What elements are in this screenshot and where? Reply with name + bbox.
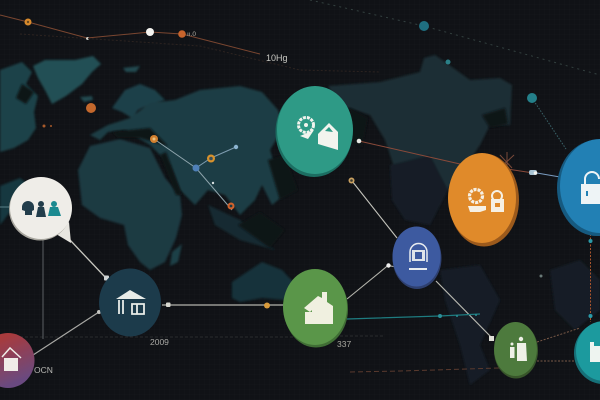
faint dotted line left: [20, 34, 380, 72]
teal line from green: [347, 314, 480, 319]
white to navy line: [70, 240, 106, 278]
icon: gear and envelope: [298, 118, 338, 150]
network on asia: [150, 135, 238, 210]
map: australia: [232, 262, 296, 302]
label 2009: 2009: [150, 337, 169, 347]
node: dark green people: [494, 322, 538, 378]
node: blue lock: [557, 139, 600, 236]
icon: people: [510, 337, 527, 361]
map: iceland and small islands: [80, 66, 140, 102]
node: navy blue vault: [392, 226, 442, 289]
red to navy line: [30, 310, 101, 357]
node: red house: [0, 333, 34, 388]
map: southeast asia islands: [208, 205, 275, 250]
teal node top: [419, 21, 429, 31]
link near white node: [0, 206, 9, 208]
line teal to orange: [357, 139, 560, 177]
map: north america: [0, 62, 38, 152]
icon: house: [116, 290, 146, 314]
teal node and dotted link: [527, 93, 566, 149]
spark mark: [500, 152, 514, 168]
node: teal bottom right: [574, 321, 600, 384]
icon: bag: [590, 342, 600, 362]
map: darker lower landmass: [390, 155, 600, 385]
node: orange gear and lock: [448, 153, 519, 246]
map: scandinavia and europe: [112, 84, 165, 118]
top label small: ıı.0: [187, 31, 196, 38]
orange map dots: [42, 103, 96, 128]
map: greenland: [33, 56, 101, 104]
line to navy node: [348, 178, 397, 238]
line navy to dark green: [436, 281, 494, 341]
top right dotted line: [310, 0, 600, 75]
node on navy line: [104, 276, 109, 280]
bottom dashed line: [350, 368, 500, 372]
line green to navy: [347, 263, 396, 299]
icon: house: [2, 348, 21, 371]
node: white people: [9, 177, 72, 243]
teal node small: [446, 60, 450, 64]
orange dotted vertical: [588, 234, 592, 322]
map: madagascar: [170, 244, 182, 266]
map: asia: [90, 86, 290, 215]
map: africa: [78, 139, 182, 270]
top label 10Hg: 10Hg: [266, 53, 288, 63]
map: south america left: [0, 178, 30, 225]
node: green house: [283, 269, 348, 348]
map: arctic landmass right: [328, 55, 512, 200]
icon: house: [304, 292, 333, 324]
label 337: 337: [337, 339, 351, 349]
dark inland seas: [16, 84, 508, 248]
small dot: [540, 274, 542, 278]
icon: people: [22, 201, 61, 217]
dotted links from dark green: [537, 328, 580, 361]
node: dark navy house: [99, 268, 161, 336]
top trend line: [0, 15, 260, 54]
faint scale line: [0, 336, 384, 337]
icon: gear and lock: [468, 190, 504, 212]
icon: vault: [409, 244, 427, 270]
navy to green line: [162, 302, 285, 308]
icon: lock: [581, 172, 600, 204]
white vertical line: [42, 240, 44, 339]
node: teal mail and gear: [276, 86, 353, 177]
label OCN: OCN: [34, 365, 53, 375]
